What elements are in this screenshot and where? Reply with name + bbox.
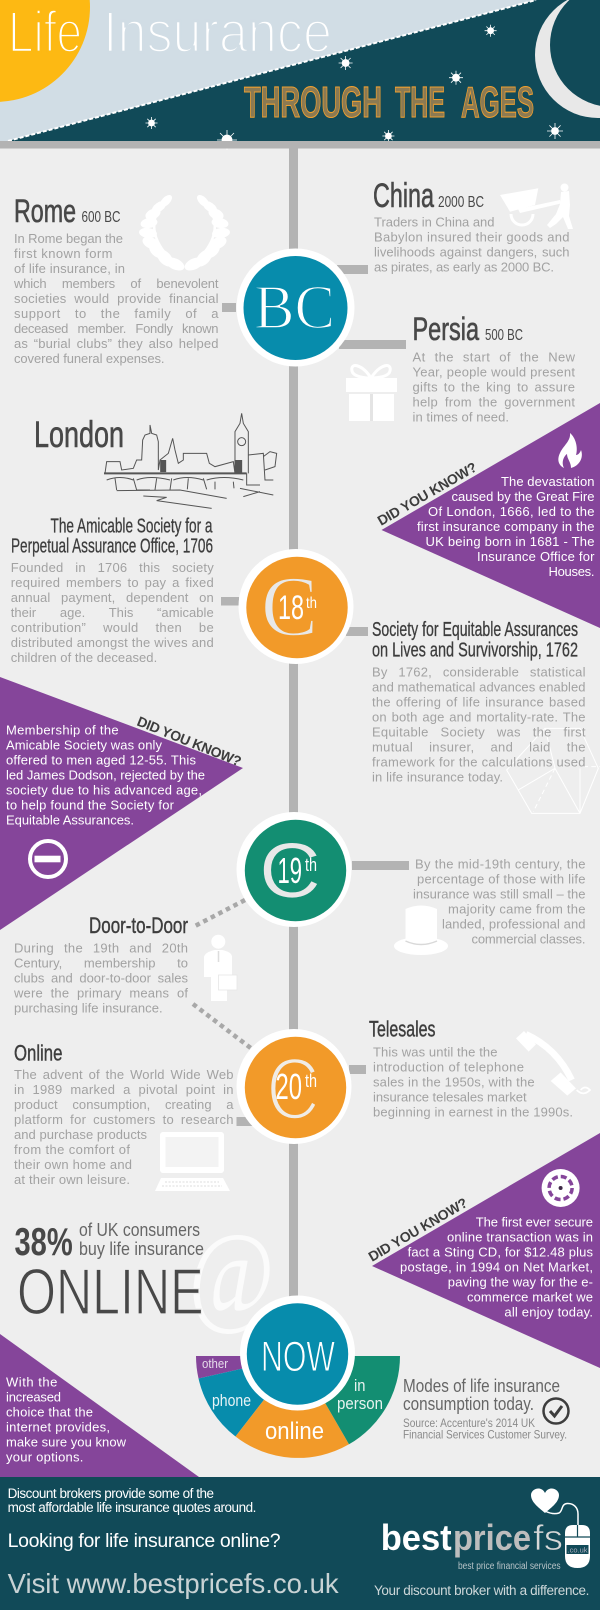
icon: businessman [204,935,237,1001]
chart: modes of consumption: other [202,1356,229,1371]
chart: modes of consumption: person [337,1394,383,1413]
icon: mouse: .co.uk [568,1548,588,1554]
text: Persia: in times of need. [412,410,509,425]
text: tagline: Your discount broker with a difference. [374,1583,589,1598]
text: Society for Equitable Assurances: on both age and mortality-rate. The [372,710,586,725]
text: Online: from the comfort of [14,1142,130,1157]
text: Amicable Society: Founded in 1706 this society [11,560,214,575]
panel: Door-to-Door [13,913,237,1016]
text: great fire [417,474,595,579]
chart: modes of consumption [196,1356,400,1458]
text: of UK consumers: buy life insurance [79,1239,204,1259]
text: discount brokers: Discount brokers provide some of the [8,1486,214,1501]
text: Amicable Society: contribution” would then be [11,620,214,635]
stat: 38%: 38% [14,1221,73,1264]
panel: did you know, Sting CD [365,1133,600,1368]
text: Door-to-Door: clubs and door-to-door sales [14,971,188,986]
text: Rome: of life insurance, in [14,261,125,276]
text: Door-to-Door: purchasing life insurance. [14,1001,163,1016]
text: Society for Equitable Assurances: framework for the calculations used [372,755,586,770]
era circle: now [240,1296,355,1410]
heading: ONLINE: ONLINE [17,1255,204,1328]
subtitle: through the ages: AGES [461,78,534,127]
text: Sting CD [400,1215,594,1320]
text: Telesales: sales in the 1950s, with the [373,1075,535,1090]
icon: laurel wreath [138,193,231,273]
text: membership: Equitable Assurances. [6,812,134,827]
text: Rome: In Rome began the [14,231,123,246]
text: Amicable Society: annual payment, dependent on [11,590,214,605]
text: discount brokers [8,1486,256,1515]
callout label: DID YOU KNOW? [135,713,244,769]
panel: Society for Equitable Assurances [372,619,600,813]
era circle: 18th century: C [261,558,318,654]
text: increased choice: increased [6,1390,61,1405]
text: Sting CD: postage, in 1994 on Net Market, [400,1260,593,1275]
text: increased choice: make sure you know [6,1435,127,1450]
chart: modes of consumption: in [354,1376,366,1395]
text: Online: in 1989 marked a pivotal point in [14,1082,234,1097]
text: Online: The advent of the World Wide Web [14,1067,234,1082]
sun [0,0,90,102]
text: Door-to-Door: Century, membership to [14,956,188,971]
icon: compact disc [542,1169,580,1207]
icon: mouse [565,1525,590,1568]
footer [0,1477,600,1610]
heading: Rome: 600 BC [82,209,120,226]
icon: check mark [544,1398,568,1424]
logo: bestpricefs: best [381,1517,452,1558]
text: modes of life insurance: consumption today. [403,1394,534,1414]
text: Online: and purchase products [14,1127,148,1142]
era circle: 20th century: 20 [276,1066,302,1107]
text: modes of life insurance: Financial Services Customer Survey. [403,1428,567,1442]
text: Persia: Year, people would present [412,365,575,380]
text: membership: offered to men aged 12-55. This [6,752,196,767]
text: Door-to-Door [13,941,188,1016]
text: Telesales [373,1045,573,1120]
subtitle: through the ages: THROUGH [244,78,382,127]
panel: did you know, amicable society [0,677,244,930]
text: Society for Equitable Assurances [372,665,586,785]
chart: modes of consumption: online [265,1418,324,1445]
connector bars [221,265,409,1126]
heading: Society for Equitable Assurances [372,619,578,662]
timeline bar [0,141,600,1308]
logo: bestpricefs: price [453,1517,531,1558]
heading: China: 2000 BC [438,194,484,211]
era circle: BC: BC [254,274,335,342]
text: Rome: as “burial clubs” they also helped [14,336,218,351]
text: Sting CD: paving the way for the e- [448,1275,593,1290]
text: membership: to help found the Society for [6,797,175,812]
text: Telesales: This was until the the [373,1045,498,1060]
text: increased choice: your options. [6,1450,83,1465]
era circle: 18th century [238,549,354,664]
panel: increased choice [0,1334,199,1477]
era circle: 18th century: th [306,595,317,612]
heading: China: China [373,177,434,215]
era circle: 19th century: C [259,826,321,914]
dotted connectors [193,900,252,1049]
panel: mid-19th century [394,856,586,955]
callout label: DID YOU KNOW? [365,1194,470,1265]
text: great fire: caused by the Great Fire [452,489,594,504]
heading: Amicable Society: The Amicable Society for a [50,516,213,538]
era circle: now: NOW [261,1333,335,1381]
title: Life Insurance [8,0,332,65]
text: great fire: UK being born in 1681 - The [426,534,594,549]
text: Telesales: insurance telesales market [373,1090,527,1105]
text: Telesales: introduction of telephone [373,1060,524,1075]
text: China: Babylon insured their goods and [374,230,570,244]
text: of UK consumers: of UK consumers [79,1220,200,1240]
icon: telephone handset [516,1031,590,1096]
text: Online [14,1067,234,1187]
text: Rome: deceased member. Fondly known [14,321,218,336]
text: Amicable Society: children of the deceased. [11,650,157,665]
text: China [374,214,570,274]
callout label: DID YOU KNOW? [374,459,479,529]
text: Society for Equitable Assurances: in life insurance today. [372,770,503,785]
icon: no entry [30,841,66,877]
logo: bestpricefs: best price financial services [458,1561,561,1572]
text: Persia: gifts to the king to assure [412,380,575,395]
text: visit website: Visit www.bestpricefs.co.uk [8,1568,339,1599]
text: great fire: The devastation [501,474,594,489]
text: Rome [13,231,219,366]
text: Sting CD: all enjoy today. [504,1305,593,1320]
icon: man with wheelbarrow [500,184,573,229]
text: Sting CD: online transaction was in [447,1230,593,1245]
panel: Online [14,1041,234,1191]
heading: London: London [34,414,124,455]
title: Life Insurance: Insurance [103,0,332,65]
text: looking for life insurance: Looking for life insurance online? [8,1530,281,1552]
heading: Telesales: Telesales [369,1017,436,1042]
logo: bestpricefs: fs [533,1517,563,1558]
era circle: 19th century: 19 [278,850,302,891]
panel: London [11,413,277,665]
text: Door-to-Door: were the primary means of [13,986,188,1001]
text: Online: platform for customers to research [14,1112,234,1127]
era circle: 19th century [236,812,352,927]
text: Society for Equitable Assurances: Equitable Society was the first [372,725,586,740]
text: discount brokers: most affordable life insurance quotes around. [8,1500,256,1515]
text: Amicable Society: their age. This “amicable [11,605,214,620]
text: membership: led James Dodson, rejected by the [6,767,205,782]
era circle: BC [236,248,354,366]
text: modes of life insurance [403,1376,568,1442]
panel: 38 percent online [14,1210,274,1338]
text: increased choice: With the [6,1375,57,1390]
text: Online: product consumption, creating a [14,1097,234,1112]
heading: Door-to-Door: Door-to-Door [89,913,188,938]
text: Persia: help from the government [412,395,575,410]
panel: Rome [13,193,231,366]
text: Rome: which members of benevolent [13,276,219,291]
text: Sting CD: The first ever secure [476,1215,593,1230]
text: mid-19th century: By the mid-19th century, the [415,856,586,871]
era circle: 20th century: th [305,1071,317,1091]
panel: Persia [346,311,576,425]
subtitle: through the ages: THE [395,78,445,127]
heading: Amicable Society [11,516,213,558]
era circle: 19th century: th [305,855,317,875]
text: Rome: support to the family of a [14,306,219,321]
text: mid-19th century: commercial classes. [472,931,586,946]
icon: heart [531,1489,559,1513]
text: membership: Membership of the [6,722,119,737]
text: Door-to-Door: During the 19th and 20th [14,941,188,956]
icon: computer [155,1132,230,1191]
text: mid-19th century: majority came from the [448,901,586,916]
panel: Telesales [369,1017,590,1120]
text: Society for Equitable Assurances: and mathematical advances enabled [372,680,586,695]
text: Persia: At the start of the New [412,350,576,365]
text: Sting CD: commerce market we [467,1290,593,1305]
text: great fire: Insurance Office for [477,549,595,564]
text: mid-19th century: insurance was still small – the [413,886,586,901]
text: membership: society due to his advanced age, [6,782,202,797]
text: Amicable Society: required members to pay a fixed [11,575,214,590]
text: mid-19th century [413,856,586,946]
text: Online: their own home and [14,1157,132,1172]
text: Online: at their own leisure. [14,1172,130,1187]
text: Persia [412,350,576,425]
icon: London skyline [104,413,277,508]
text: membership [6,722,205,827]
heading: Online: Online [14,1041,62,1066]
heading: Persia: 500 BC [485,327,523,344]
icon: top hat [394,906,448,955]
icon: geometry doodle [507,728,600,813]
mouse cable [545,1503,578,1526]
text: increased choice [6,1375,127,1465]
icon: gift [346,366,397,421]
text: Society for Equitable Assurances: mutual insurer, and laid the [372,740,586,755]
text: increased choice: choice that the [6,1405,93,1420]
text: Rome: first known form [14,246,112,261]
era circle: 20th century: C [266,1039,320,1138]
text: membership: Amicable Society was only [6,737,162,752]
heading: Rome: Rome [14,193,76,229]
panel: China [373,177,573,274]
text: modes of life insurance: Source: Accenture's 2014 UK [403,1416,535,1430]
text: great fire: Houses. [548,564,594,579]
text: Amicable Society: distributed amongst the wives and [11,635,214,650]
text: modes of life insurance: Modes of life insurance [403,1376,560,1396]
logo: bestpricefs [381,1489,590,1572]
text: Sting CD: fact a Sting CD, for $12.48 plus [408,1245,594,1260]
header banner [0,0,600,150]
text: Rome: societies would provide financial [14,291,219,306]
text: mid-19th century: landed, professional and [442,916,586,931]
text: Society for Equitable Assurances: By 1762, considerable statistical [372,665,586,680]
heading: Persia: Persia [412,311,479,347]
text: great fire: first insurance company in the [417,519,594,534]
text: increased choice: internet provides, [6,1420,110,1435]
icon: at sign: @ [188,1210,274,1338]
night sky [8,0,600,141]
text: China: livelihoods against dangers, such [374,244,570,260]
icon: flame [558,433,582,468]
title: Life Insurance: Life [8,0,82,65]
text: mid-19th century: percentage of those with life [417,871,586,886]
text: China: Traders in China and [374,214,494,230]
text: Society for Equitable Assurances: the offering of life insurance based [372,695,586,710]
era circle: 18th century: 18 [278,589,304,627]
text: Telesales: beginning in earnest in the 1990s. [373,1105,573,1120]
text: Amicable Society [11,560,214,665]
text: China: as pirates, as early as 2000 BC. [374,260,554,274]
text: great fire: Of London, 1666, led to the [428,504,594,519]
stars [146,25,563,150]
moon [535,0,600,118]
chart: modes of consumption: phone [212,1391,251,1410]
era circle: 20th century [236,1029,352,1144]
panel: did you know, great fire [374,403,600,628]
text: Rome: covered funeral expenses. [14,351,164,366]
text: of UK consumers [79,1220,204,1259]
heading: Amicable Society: Perpetual Assurance Office, 1706 [11,536,213,558]
